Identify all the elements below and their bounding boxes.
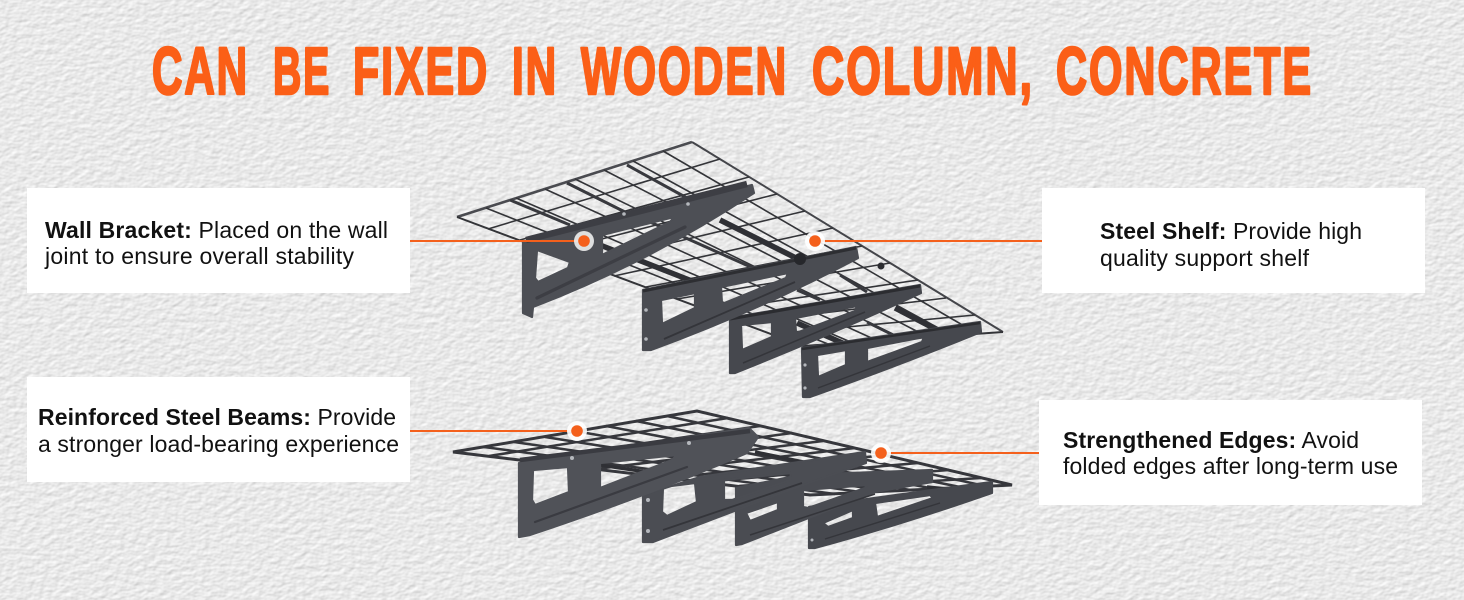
upper shelf product image xyxy=(457,142,1003,397)
lower bracket 1 xyxy=(519,428,758,537)
upper wire mesh xyxy=(457,142,1003,346)
callout: steel shelf: quality support shelf xyxy=(1100,245,1310,271)
callout: reinforced steel beams: Reinforced Steel Beams: Provide xyxy=(38,404,396,430)
title: CONCRETE xyxy=(1056,34,1313,109)
title: CAN xyxy=(152,34,249,109)
upper bracket 1 xyxy=(523,184,754,317)
leader: strengthened edges xyxy=(871,443,1039,463)
title: IN xyxy=(512,34,558,109)
upper bolt xyxy=(878,262,884,270)
title: COLUMN, xyxy=(812,34,1034,109)
callout: wall bracket: joint to ensure overall stability xyxy=(44,243,354,269)
lower bracket 3 xyxy=(736,470,932,545)
callout: reinforced steel beams: a stronger load-bearing experience xyxy=(38,431,399,457)
callout: wall bracket: Wall Bracket: Placed on the wall xyxy=(45,217,388,243)
title xyxy=(152,34,1313,109)
title: FIXED xyxy=(353,34,489,109)
callout: steel shelf xyxy=(1042,188,1425,293)
callout: strengthened edges xyxy=(1039,400,1422,505)
leader: wall bracket xyxy=(410,231,594,251)
title: WOODEN xyxy=(581,34,788,109)
upper bracket 4 xyxy=(802,322,981,397)
leader: reinforced steel beams xyxy=(410,421,587,441)
callout: steel shelf: Steel Shelf: Provide high xyxy=(1100,218,1362,244)
callout: strengthened edges: folded edges after long-term use xyxy=(1063,453,1398,479)
leader: steel shelf xyxy=(805,231,1042,251)
callout: reinforced steel beams xyxy=(27,377,410,482)
upper bracket 2 xyxy=(643,247,858,350)
upper bracket 3 xyxy=(730,285,921,373)
callout: strengthened edges: Strengthened Edges: Avoid xyxy=(1063,427,1359,453)
lower wire mesh xyxy=(453,411,1012,495)
lower bracket 2 xyxy=(643,452,866,542)
title: BE xyxy=(273,34,331,109)
lower bracket 4 xyxy=(809,482,992,548)
lower shelf product image xyxy=(453,411,1012,548)
callout: wall bracket xyxy=(27,188,410,293)
